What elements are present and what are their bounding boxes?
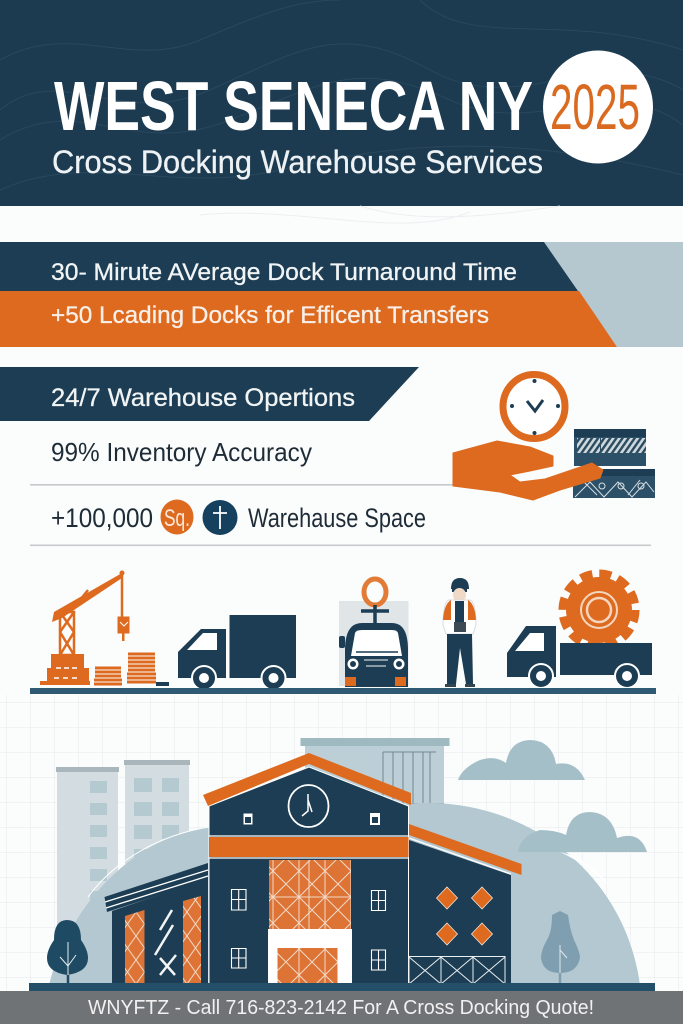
icon: worker — [443, 578, 476, 687]
left wing — [104, 863, 208, 984]
stat: warehouse space: +100,000 — [51, 503, 153, 533]
icon: bottom box — [573, 469, 655, 498]
icon: hand — [453, 441, 603, 500]
cloud — [458, 740, 585, 780]
windows — [232, 890, 386, 970]
stat: dock turnaround: 30- Mirute AVerage Dock Turnaround Time — [51, 259, 517, 286]
right wing — [409, 824, 522, 984]
cloud — [518, 812, 647, 852]
tree — [541, 911, 580, 984]
icon: sq badge: Sq. — [164, 505, 190, 532]
icon: clock — [503, 374, 565, 438]
lattice door — [269, 860, 351, 929]
diamonds — [436, 887, 492, 945]
stats panel: turnaround and docks — [0, 206, 683, 347]
year badge — [543, 50, 653, 164]
banner: warehouse operations: 24/7 Warehouse Opertions — [51, 384, 355, 412]
ground line — [29, 983, 655, 991]
banner: warehouse operations — [0, 367, 419, 421]
icon: sq badge — [160, 500, 194, 534]
footer bar — [0, 991, 683, 1024]
icon: crane and cargo — [40, 570, 169, 686]
main building — [203, 753, 411, 985]
tree — [47, 920, 88, 984]
fence — [409, 956, 505, 984]
roof — [203, 753, 411, 806]
icon: box truck — [178, 615, 296, 690]
icon: top box — [574, 429, 646, 466]
road line — [30, 688, 656, 694]
icon: flatbed truck with gear — [507, 574, 652, 688]
grid background — [0, 695, 683, 991]
stat: inventory accuracy: 99% Inventory Accuracy — [51, 437, 312, 467]
illustration: warehouse scene — [29, 738, 655, 991]
subtitle: Cross Docking Warehouse Services — [52, 144, 543, 180]
clock — [288, 785, 328, 827]
stat: warehouse space — [51, 500, 426, 535]
loading door — [268, 929, 352, 984]
icon: ft badge — [202, 500, 238, 535]
title: WEST SENECA NY — [54, 67, 533, 145]
icon: van with location pin — [339, 579, 408, 687]
dome hill — [49, 803, 640, 985]
background towers — [56, 760, 190, 985]
orange band — [209, 837, 408, 857]
stat: loading docks: +50 Lcading Docks for Efficent Transfers — [51, 302, 489, 329]
footer bar: WNYFTZ - Call 716-823-2142 For A Cross Docking Quote! — [88, 997, 594, 1019]
stat: warehouse space: Warehause Space — [248, 503, 426, 533]
icon: hand holding clock and boxes — [453, 374, 655, 500]
illustration: logistics row — [30, 570, 656, 694]
back building — [300, 738, 450, 820]
header panel — [0, 0, 683, 206]
